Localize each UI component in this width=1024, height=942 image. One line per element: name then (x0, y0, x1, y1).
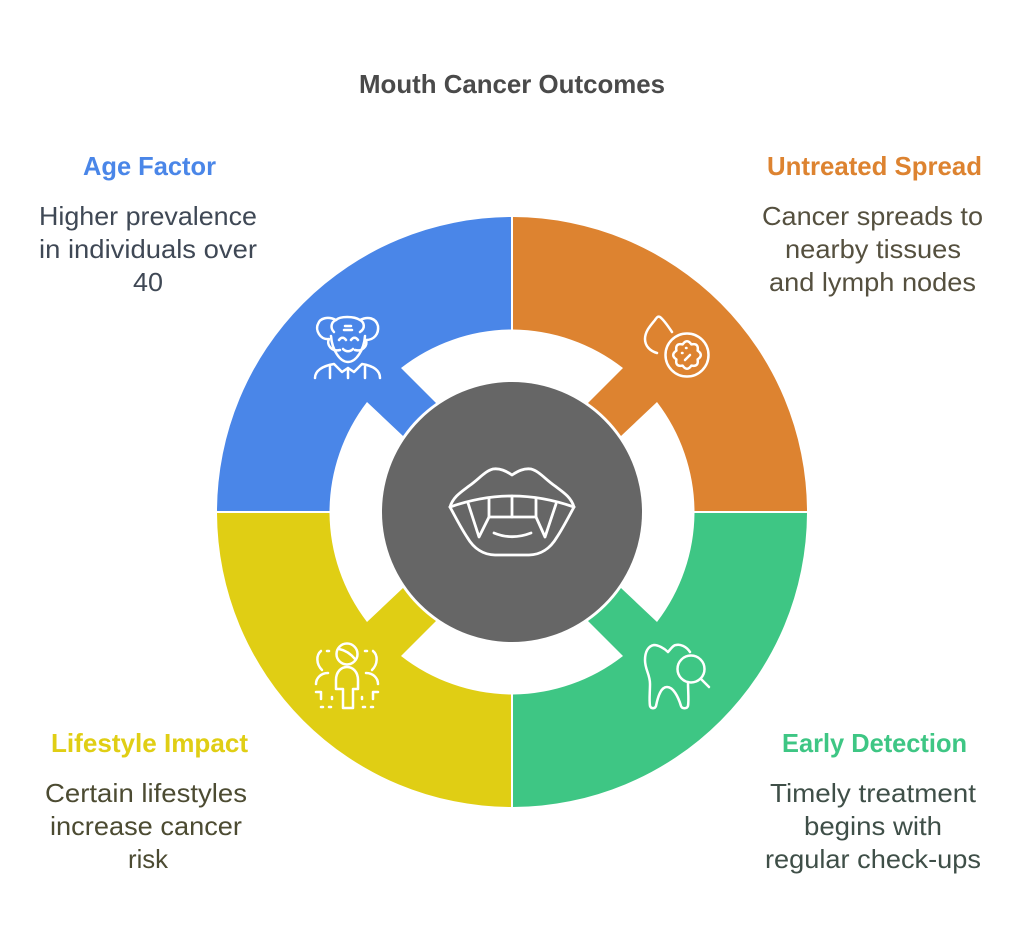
text block: age factor description: in individuals over (39, 234, 257, 264)
text block: lifestyle impact description: risk (128, 844, 169, 874)
text block: lifestyle impact description (45, 778, 247, 874)
text block: untreated spread description: and lymph nodes (769, 267, 976, 297)
text block: early detection description: regular check-ups (765, 844, 981, 874)
text block: early detection description: Timely treatment (770, 778, 977, 808)
text block: lifestyle impact description: Certain lifestyles (45, 778, 247, 808)
title: Mouth Cancer Outcomes (359, 69, 665, 99)
segment: untreated spread (orange) (513, 217, 807, 511)
icon: elderly person (315, 317, 380, 378)
text block: age factor description (39, 201, 257, 297)
text block: age factor description: Higher prevalence (39, 201, 257, 231)
icon: mouth with fangs (450, 469, 574, 555)
text block: untreated spread description: Cancer spreads to (762, 201, 983, 231)
text block: untreated spread description (762, 201, 983, 297)
panel: age factor text (39, 151, 257, 297)
center circle (382, 382, 642, 642)
icon: tooth and magnifier (645, 645, 709, 708)
segment: lifestyle impact (yellow) (217, 513, 511, 807)
panel: early detection text (765, 728, 981, 874)
segment: age factor (blue) (217, 217, 511, 511)
panel: untreated spread text (762, 151, 983, 297)
panel: lifestyle impact text (45, 728, 248, 874)
icon: droplet and cancer cell (645, 317, 708, 376)
segment: early detection (green) (513, 513, 807, 807)
text block: lifestyle impact description: increase cancer (50, 811, 242, 841)
text block: age factor description: 40 (133, 267, 163, 297)
text block: early detection description (765, 778, 981, 874)
heading: untreated spread: Untreated Spread (767, 151, 982, 181)
heading: early detection: Early Detection (782, 728, 967, 758)
text block: untreated spread description: nearby tissues (785, 234, 961, 264)
heading: age factor: Age Factor (83, 151, 216, 181)
icon: person with dashed figures (316, 644, 378, 708)
text block: early detection description: begins with (804, 811, 942, 841)
heading: lifestyle impact: Lifestyle Impact (51, 728, 248, 758)
